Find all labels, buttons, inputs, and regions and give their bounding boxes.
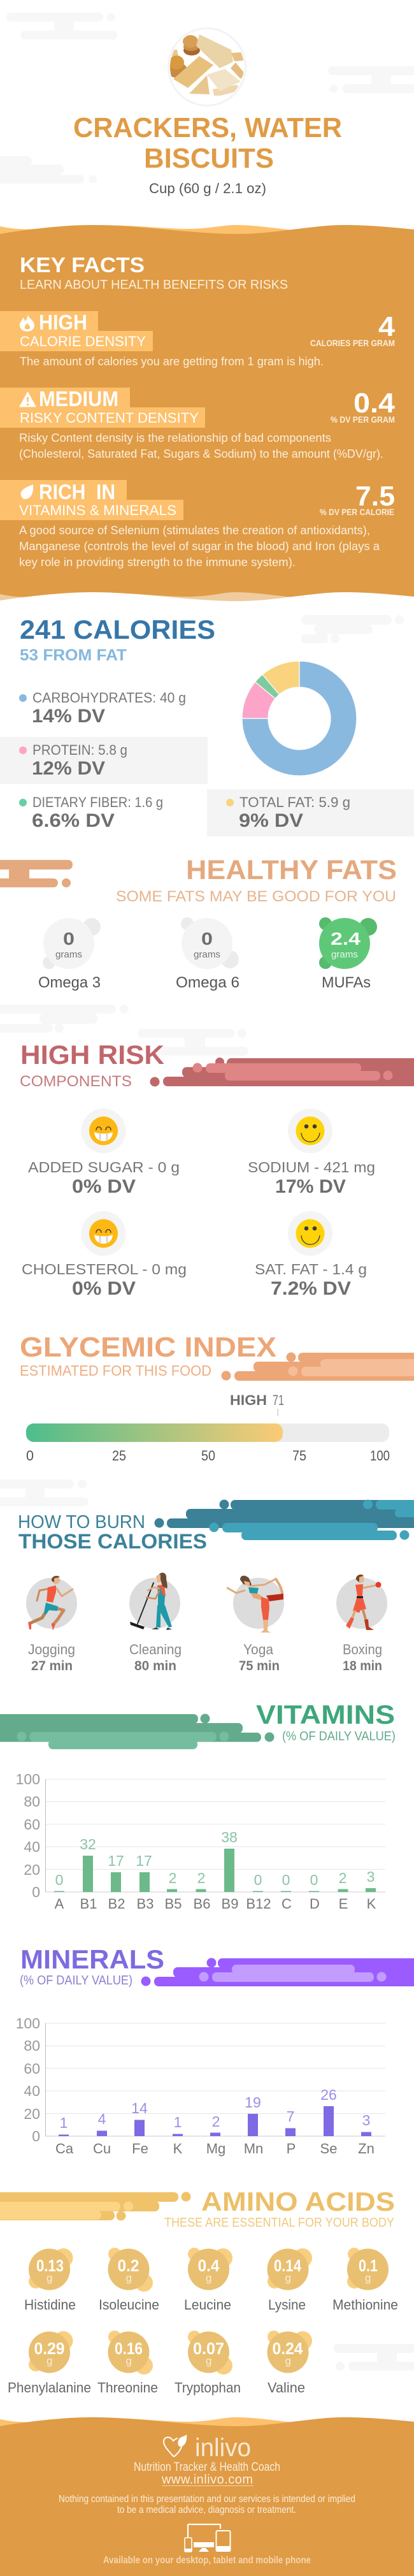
item: histidine: g — [46, 2272, 52, 2284]
glycemic value: HIGH — [230, 1392, 267, 1408]
legend: protein: PROTEIN: 5.8 g — [32, 742, 127, 758]
panel: footer — [0, 2417, 414, 2576]
glycemic bar — [26, 1423, 389, 1442]
activity: jogging — [26, 1576, 77, 1673]
fact: high calorie density: The amount of calories you are getting from 1 gram is high. — [20, 355, 324, 368]
item: lysine: 0.14 — [274, 2256, 301, 2275]
heading: key facts — [20, 253, 288, 292]
heading decoration — [0, 860, 73, 887]
item: phenylalanine: Phenylalanine — [8, 2380, 91, 2396]
glycemic value — [230, 1392, 284, 1416]
legend: dietary fiber: 6.6% DV — [32, 810, 115, 831]
item: tryptophan: g — [206, 2355, 211, 2367]
heading: key facts: KEY FACTS — [20, 253, 145, 277]
subheading: components: COMPONENTS — [20, 1073, 132, 1090]
fact: high calorie density: 4 — [378, 311, 396, 342]
item: methionine: g — [365, 2272, 371, 2284]
bars — [54, 1849, 376, 1892]
y axis labels: 80 — [24, 1793, 40, 1810]
category labels: Mn — [244, 2141, 263, 2157]
legend: total fat — [207, 789, 414, 836]
icon: warning triangle — [19, 391, 36, 407]
item: lysine — [268, 2248, 312, 2313]
bar chart: minerals — [16, 2015, 385, 2157]
activity: yoga: 75 min — [239, 1659, 280, 1673]
category labels: D — [310, 1896, 320, 1912]
item: sodium — [248, 1109, 375, 1197]
heading: how to burn: HOW TO BURN — [18, 1512, 145, 1532]
icon: leaf — [21, 484, 33, 499]
icon: yoga figure — [227, 1576, 283, 1633]
category labels: B2 — [108, 1896, 125, 1912]
category labels: Cu — [93, 2141, 111, 2157]
item: valine — [268, 2331, 312, 2396]
glycemic scale: 100 — [370, 1448, 390, 1464]
glycemic scale — [26, 1448, 390, 1464]
activity: cleaning: Cleaning — [129, 1641, 182, 1657]
background decoration — [334, 2344, 414, 2371]
footer wave — [0, 2417, 414, 2576]
tagline: Nutrition Tracker & Health Coach — [134, 2461, 280, 2474]
icon: flame — [20, 314, 34, 331]
item: histidine — [24, 2248, 76, 2313]
item: cholesterol — [22, 1211, 187, 1299]
panel: amino acids — [0, 2187, 414, 2396]
legend: dietary fiber — [19, 794, 163, 831]
panel: key facts — [0, 225, 414, 612]
category labels: B3 — [137, 1896, 153, 1912]
item: isoleucine: g — [126, 2272, 132, 2284]
panel: minerals — [16, 1944, 414, 2157]
y axis labels: 0 — [32, 1884, 40, 1900]
logo: inlivo: inlivo — [195, 2434, 251, 2462]
fact: rich in vitamins and minerals: % DV PER CALORIE — [320, 507, 394, 517]
bar values: 7 — [287, 2108, 294, 2125]
item: omega 3: grams — [55, 949, 82, 960]
item: leucine: 0.4 — [197, 2256, 220, 2275]
panel: how to burn those calories — [18, 1499, 414, 1673]
legend: carbohydrates: 14% DV — [32, 706, 105, 727]
item: leucine: Leucine — [184, 2297, 231, 2313]
glycemic scale: 75 — [292, 1448, 306, 1464]
title — [73, 112, 342, 174]
panel: vitamins — [0, 1699, 396, 1912]
fact: high calorie density: CALORIES PER GRAM — [310, 338, 395, 348]
icon: jogger figure — [28, 1576, 73, 1631]
item: phenylalanine — [8, 2331, 91, 2396]
bar values: 38 — [221, 1829, 238, 1845]
y axis labels: 20 — [24, 1861, 40, 1878]
icon: smiling face — [288, 1211, 332, 1256]
category labels: P — [287, 2141, 296, 2157]
activity: yoga: Yoga — [243, 1641, 274, 1657]
icon: devices — [185, 2524, 231, 2552]
item: added sugar — [28, 1109, 180, 1197]
glycemic scale: 25 — [112, 1448, 126, 1464]
bar values: 0 — [282, 1872, 290, 1888]
subheading: THESE ARE ESSENTIAL FOR YOUR BODY — [164, 2216, 394, 2230]
chart grid — [45, 1779, 385, 1892]
fact: high calorie density: HIGH — [39, 310, 87, 334]
item: histidine: Histidine — [24, 2297, 76, 2313]
y axis labels: 100 — [16, 2015, 40, 2032]
y axis labels: 0 — [32, 2128, 40, 2144]
category labels: Fe — [132, 2141, 148, 2157]
background decoration: mid clouds — [0, 1005, 248, 1056]
item: saturated fat: 7.2% DV — [271, 1278, 351, 1299]
legend: carbohydrates: CARBOHYDRATES: 40 g — [32, 690, 186, 706]
item: methionine: Methionine — [332, 2297, 398, 2313]
icon: grinning face — [82, 1211, 126, 1256]
heading: glycemic index: GLYCEMIC INDEX — [20, 1332, 276, 1363]
top wave — [0, 225, 414, 599]
panel: healthy fats — [0, 855, 397, 991]
item: phenylalanine: g — [46, 2355, 52, 2367]
activity: yoga — [227, 1576, 284, 1673]
heading decoration — [141, 1958, 414, 1986]
panel: high risk components — [20, 1040, 414, 1299]
food photo: crackers — [167, 28, 246, 106]
fact: medium risky content density: MEDIUM — [39, 387, 118, 411]
bar values: 14 — [131, 2100, 148, 2116]
item: mufas — [319, 917, 377, 991]
item: omega 3: Omega 3 — [38, 974, 101, 991]
item: threonine — [97, 2331, 158, 2396]
y axis labels — [16, 2015, 40, 2144]
fact: rich in vitamins and minerals: 7.5 — [355, 481, 395, 512]
subheading: SOME FATS MAY BE GOOD FOR YOU — [116, 888, 396, 905]
y axis labels: 60 — [24, 1816, 40, 1833]
heading: vitamins: VITAMINS — [256, 1699, 395, 1729]
item: methionine: 0.1 — [359, 2256, 378, 2275]
fact: medium risky content density: RISKY CONTENT DENSITY — [20, 410, 199, 426]
fact: rich in vitamins and minerals: RICH IN — [39, 480, 115, 504]
activity: jogging: 27 min — [31, 1659, 73, 1673]
item: tryptophan — [175, 2331, 241, 2396]
item: omega 6: 0 — [201, 929, 213, 949]
item: omega 3: 0 — [63, 929, 75, 949]
category labels: Zn — [358, 2141, 375, 2157]
heading: high risk: HIGH RISK — [20, 1040, 164, 1070]
bar values: 4 — [98, 2111, 106, 2127]
legend: protein: 12% DV — [32, 758, 105, 779]
bar values: 1 — [60, 2114, 68, 2131]
background decoration: burn clouds — [0, 1480, 89, 1506]
legend: total fat: TOTAL FAT: 5.9 g — [239, 794, 350, 810]
bar values: 0 — [254, 1872, 262, 1888]
item: threonine: Threonine — [97, 2380, 158, 2396]
chart grid — [45, 2023, 385, 2136]
fact: medium risky content density: 0.4 — [353, 388, 396, 419]
y axis labels: 40 — [24, 2083, 40, 2099]
fact: rich in vitamins and minerals: A good source of Selenium (stimulates the creation of antioxidants), — [19, 524, 370, 537]
heading: amino acids: AMINO ACIDS — [201, 2187, 395, 2216]
item: added sugar: 0% DV — [72, 1176, 136, 1197]
category labels: K — [173, 2141, 183, 2157]
category labels — [55, 1896, 376, 1912]
item: leucine — [184, 2248, 232, 2313]
item: isoleucine — [99, 2248, 159, 2313]
icon: boxer figure — [346, 1575, 381, 1630]
icon: grinning face — [82, 1109, 126, 1153]
bar chart: vitamins — [16, 1771, 385, 1912]
bar values — [60, 2086, 370, 2131]
fact: high calorie density — [0, 310, 396, 368]
activity: boxing — [336, 1575, 387, 1673]
category labels: B1 — [80, 1896, 97, 1912]
heading: minerals: MINERALS — [20, 1944, 164, 1974]
activity: cleaning — [129, 1573, 182, 1673]
category labels: B5 — [165, 1896, 182, 1912]
glycemic value: 71 — [273, 1392, 284, 1408]
item: sodium: 17% DV — [275, 1176, 346, 1197]
item: mufas: grams — [331, 949, 358, 960]
bar values: 2 — [339, 1870, 346, 1886]
category labels: Ca — [55, 2141, 74, 2157]
y axis labels: 80 — [24, 2037, 40, 2054]
glycemic scale: 50 — [201, 1448, 215, 1464]
bar values: 26 — [320, 2086, 337, 2103]
title: BISCUITS — [144, 143, 274, 174]
item: methionine — [332, 2248, 398, 2313]
background decoration — [301, 615, 404, 643]
item: isoleucine: Isoleucine — [99, 2297, 159, 2313]
panel: glycemic index — [20, 1332, 414, 1464]
subheading: (% OF DAILY VALUE) — [282, 1729, 396, 1743]
y axis labels: 60 — [24, 2060, 40, 2077]
bar values: 19 — [245, 2094, 261, 2111]
item: histidine: 0.13 — [36, 2256, 64, 2275]
heading: calories: 241 CALORIES — [20, 615, 215, 644]
category labels: Mg — [206, 2141, 225, 2157]
bar values: 0 — [310, 1872, 318, 1888]
fact: rich in vitamins and minerals: Manganese (controls the level of sugar in the blood) and Iron (plays a — [19, 540, 380, 553]
disclaimer: to be a medical advice, diagnosis or treatment. — [117, 2505, 296, 2515]
item: lysine: Lysine — [268, 2297, 306, 2313]
category labels: B6 — [194, 1896, 210, 1912]
legend: protein — [0, 737, 208, 784]
activity: jogging: Jogging — [28, 1641, 75, 1657]
y axis labels: 40 — [24, 1838, 40, 1855]
category labels: A — [55, 1896, 64, 1912]
activity: boxing: Boxing — [343, 1641, 382, 1657]
category labels: K — [367, 1896, 376, 1912]
item: isoleucine: 0.2 — [117, 2256, 139, 2275]
legend: total fat: 9% DV — [239, 810, 303, 831]
heading decoration — [0, 2192, 191, 2221]
bar values: 2 — [212, 2113, 220, 2130]
item: omega 6 — [176, 917, 239, 991]
heading decoration — [150, 1058, 414, 1086]
item: leucine: g — [206, 2272, 211, 2284]
item: saturated fat — [255, 1211, 367, 1299]
item: mufas: MUFAs — [322, 974, 371, 991]
bar values: 2 — [169, 1870, 176, 1886]
item: cholesterol: CHOLESTEROL - 0 mg — [22, 1261, 187, 1277]
fact: medium risky content density: % DV PER GRAM — [331, 414, 395, 425]
icon: smiling face — [288, 1109, 332, 1153]
item: phenylalanine: 0.29 — [34, 2339, 65, 2358]
bar values: 2 — [197, 1870, 205, 1886]
bars — [59, 2106, 371, 2136]
item: omega 3 — [38, 918, 101, 991]
website link: www.inlivo.com — [161, 2473, 253, 2487]
heading decoration — [222, 1353, 414, 1381]
title: CRACKERS, WATER — [73, 112, 342, 143]
bar values: 3 — [367, 1868, 375, 1885]
item: omega 6: grams — [194, 949, 220, 960]
heading: those calories: THOSE CALORIES — [18, 1530, 207, 1553]
bar values: 17 — [136, 1852, 152, 1869]
category labels: B12 — [246, 1896, 271, 1912]
heading decoration — [0, 1714, 274, 1749]
fact: rich in vitamins and minerals: key role in providing strength to the immune system). — [19, 556, 296, 569]
y axis labels — [16, 1771, 40, 1900]
item: threonine: 0.16 — [115, 2339, 143, 2358]
activity: boxing: 18 min — [343, 1659, 382, 1673]
legend: dietary fiber: DIETARY FIBER: 1.6 g — [32, 794, 163, 810]
fact: high calorie density: CALORIE DENSITY — [20, 333, 146, 349]
y axis labels: 100 — [16, 1771, 40, 1787]
y axis labels: 20 — [24, 2106, 40, 2122]
item: threonine: g — [126, 2355, 132, 2367]
activity: cleaning: 80 min — [134, 1659, 176, 1673]
item: added sugar: ADDED SUGAR - 0 g — [28, 1159, 180, 1175]
panel: calories — [0, 615, 414, 836]
bottom wave — [0, 592, 414, 612]
item: sodium: SODIUM - 421 mg — [248, 1159, 375, 1175]
category labels — [55, 2141, 375, 2157]
item: omega 6: Omega 6 — [176, 974, 239, 991]
item: lysine: g — [285, 2272, 291, 2284]
fact: medium risky content density: (Cholesterol, Saturated Fat, Sugars & Sodium) to the amount (%DV/gr). — [19, 448, 383, 460]
bar values — [55, 1829, 375, 1888]
logo: inlivo — [164, 2434, 251, 2462]
fact: medium risky content density: Risky Content density is the relationship of bad components — [19, 432, 331, 444]
item: valine: g — [285, 2355, 291, 2367]
item: mufas: 2.4 — [331, 929, 360, 949]
fact: medium risky content density — [0, 387, 396, 460]
availability note: Available on your desktop, tablet and mobile phone — [103, 2555, 311, 2566]
item: saturated fat: SAT. FAT - 1.4 g — [255, 1261, 367, 1277]
category labels: Se — [320, 2141, 337, 2157]
subheading: ESTIMATED FOR THIS FOOD — [20, 1362, 211, 1379]
subheading: from fat: 53 FROM FAT — [20, 646, 127, 664]
category labels: E — [339, 1896, 348, 1912]
category labels: B9 — [222, 1896, 238, 1912]
item: cholesterol: 0% DV — [72, 1278, 136, 1299]
fact: rich in vitamins and minerals: VITAMINS & MINERALS — [19, 502, 176, 518]
background decoration: top clouds — [0, 13, 414, 184]
item: tryptophan: 0.07 — [193, 2339, 224, 2358]
bar values: 32 — [80, 1836, 96, 1852]
fact: rich in vitamins and minerals — [0, 480, 395, 569]
disclaimer: Nothing contained in this presentation and our services is intended or implied — [59, 2494, 355, 2505]
icon: heart with leaf — [164, 2434, 187, 2457]
heading: key facts: LEARN ABOUT HEALTH BENEFITS OR RISKS — [20, 278, 288, 292]
glycemic scale: 0 — [26, 1448, 34, 1464]
item: valine: 0.24 — [273, 2339, 303, 2358]
item: valine: Valine — [268, 2380, 305, 2396]
bar values: 1 — [174, 2114, 182, 2130]
disclaimer — [59, 2494, 355, 2515]
serving size: Cup (60 g / 2.1 oz) — [149, 180, 266, 196]
bar values: 0 — [55, 1872, 63, 1888]
category labels: C — [282, 1896, 292, 1912]
donut chart — [242, 661, 357, 776]
heading decoration — [154, 1499, 414, 1540]
bar values: 3 — [362, 2112, 370, 2128]
item: tryptophan: Tryptophan — [175, 2380, 241, 2396]
heading: healthy fats: HEALTHY FATS — [186, 855, 397, 885]
bar values: 17 — [108, 1852, 124, 1869]
subheading: (% OF DAILY VALUE) — [20, 1974, 132, 1988]
legend: carbohydrates — [19, 690, 186, 727]
icon: cleaner figure — [130, 1573, 172, 1630]
